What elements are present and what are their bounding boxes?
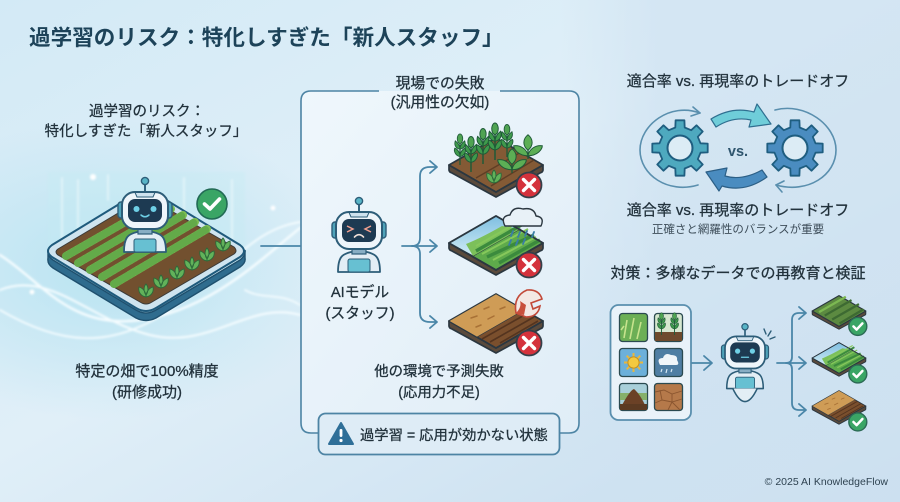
callout [318,414,560,454]
branching arrows [402,161,437,328]
tile: crops [654,313,682,342]
tile: sun [620,348,648,376]
tile: rain [654,348,682,376]
vs label: vs. [728,144,748,160]
left heading: 特化しすぎた「新人スタッフ」 [45,123,247,140]
left caption [75,363,219,401]
sprout row [139,238,230,297]
panel: failure in the field [301,75,579,454]
background light waves [0,172,300,338]
tile: grass [620,314,648,342]
panel: failure in the field: (応用力不足) [398,384,480,401]
happy robot [118,177,172,252]
panel: diverse data [610,305,691,420]
heading: countermeasure: 対策：多様なデータでの再教育と検証 [610,264,866,282]
right gear [767,120,823,176]
panel caption: 他の環境で予測失敗 [374,363,504,380]
icon: warning [329,423,353,444]
trained field illustration [48,177,245,320]
title: 過学習のリスク：特化しすぎた「新人スタッフ」 [29,25,504,50]
field: dry soil [449,290,543,356]
footer copyright: © 2025 AI KnowledgeFlow [765,476,888,488]
panel: failure in the field: (スタッフ) [325,305,395,322]
sad robot [332,197,386,272]
panel heading: 現場での失敗 [396,75,485,92]
retrained robot [722,324,775,402]
field: different crops [449,123,543,198]
heading: tradeoff: 適合率 vs. 再現率のトレードオフ [627,73,849,90]
verified field: crops [812,296,867,335]
left gear [652,120,708,176]
callout text: 過学習 = 応用が効かない状態 [360,427,548,444]
bottom curved arrow [706,168,767,191]
tile: cracked earth [654,384,682,410]
field: rainy weather [449,208,543,278]
branching arrows to verified fields [777,307,806,416]
field platform [48,192,245,320]
left caption: 特定の畑で100%精度 [75,363,219,380]
left caption: (研修成功) [112,384,182,401]
gears tradeoff diagram [640,104,836,192]
verified field: rain [812,343,867,383]
left heading [45,103,247,140]
verified field: soil [812,391,867,431]
tradeoff caption: 正確さと網羅性のバランスが重要 [652,222,824,236]
success check [197,189,227,219]
robot caption: AIモデル [331,283,389,301]
arrow: data to robot [692,356,712,370]
panel: failure in the field: (汎用性の欠如) [391,94,489,111]
left heading: 過学習のリスク： [89,103,205,120]
tradeoff caption [627,202,849,236]
tradeoff caption: 適合率 vs. 再現率のトレードオフ [627,202,849,219]
top curved arrow [711,104,771,127]
arrow to panel [261,239,313,253]
tile: soil mound [620,384,648,410]
outer cycle arcs [640,107,836,192]
